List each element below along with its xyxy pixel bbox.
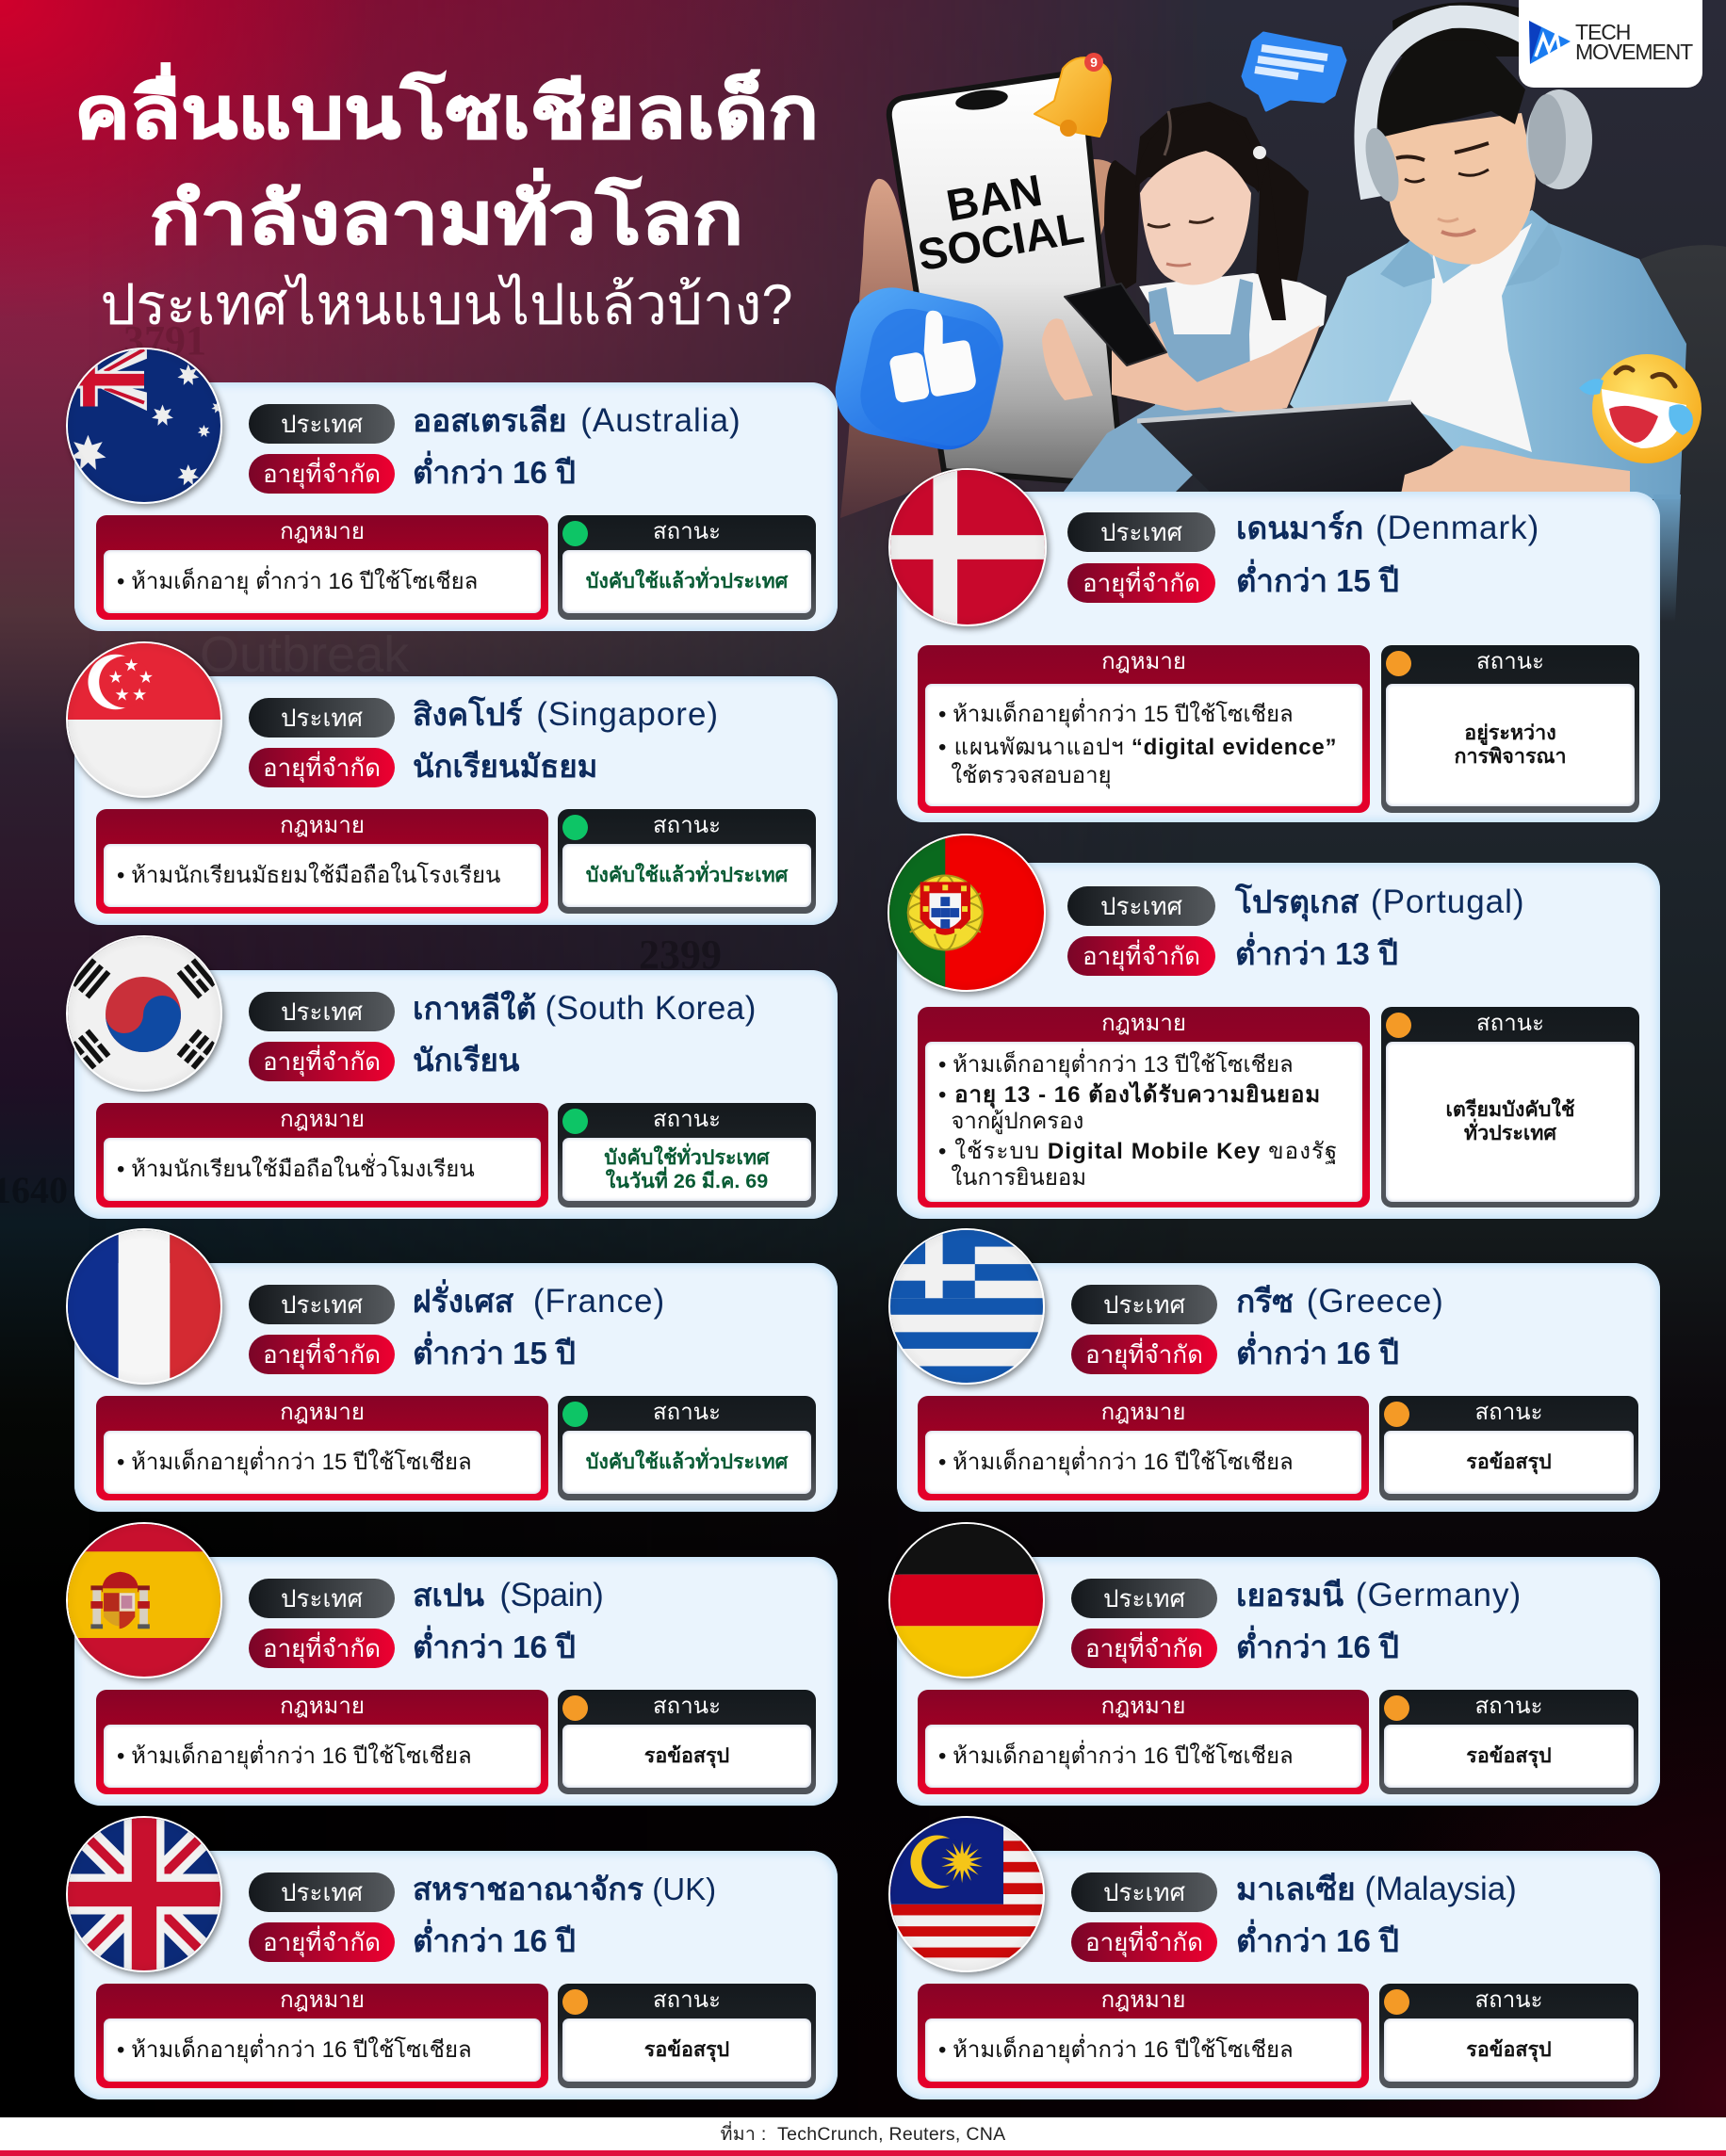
age limit value: ต่ำกว่า 15 ปี bbox=[413, 1336, 576, 1370]
flag: Malaysia bbox=[888, 1816, 1045, 1972]
label: country bbox=[1071, 1872, 1217, 1912]
panel: Denmark bbox=[897, 492, 1660, 822]
label: age limit bbox=[249, 1922, 395, 1962]
status box: บังคับใช้แล้วทั่วประเทศ bbox=[586, 864, 788, 886]
status box bbox=[1379, 1984, 1638, 2088]
label: country bbox=[249, 1285, 395, 1324]
label: country bbox=[249, 992, 395, 1031]
status box: สถานะ bbox=[653, 1987, 721, 2013]
label: country bbox=[1067, 512, 1215, 552]
tablet bbox=[1137, 401, 1455, 494]
law box: • ใช้ระบบ Digital Mobile Key ของรัฐ bbox=[938, 1139, 1338, 1164]
hand holding phone bbox=[840, 179, 947, 518]
status box: สถานะ bbox=[653, 519, 721, 544]
status box: บังคับใช้ทั่วประเทศ bbox=[604, 1145, 770, 1168]
status box bbox=[558, 1103, 816, 1208]
status box: รอข้อสรุป bbox=[1466, 2038, 1552, 2061]
label: country bbox=[249, 404, 395, 444]
status box bbox=[558, 809, 816, 914]
label: country bbox=[1067, 886, 1215, 926]
country name: เยอรมนี (Germany) bbox=[1236, 1577, 1522, 1613]
status box: สถานะ bbox=[653, 813, 721, 838]
label: age limit bbox=[1071, 1335, 1217, 1374]
law box: • อายุ 13 - 16 ต้องได้รับความยินยอม bbox=[938, 1082, 1321, 1108]
status box bbox=[558, 1396, 816, 1500]
law box bbox=[96, 1396, 548, 1500]
status box: ในวันที่ 26 มี.ค. 69 bbox=[606, 1170, 768, 1192]
label: country: ประเทศ bbox=[281, 997, 363, 1025]
flag: Greece bbox=[888, 1228, 1045, 1385]
background: 2399 bbox=[639, 932, 722, 978]
law box: กฎหมาย bbox=[1101, 649, 1186, 674]
label: country: ประเทศ bbox=[281, 1878, 363, 1906]
footer: source: ที่มา : TechCrunch, Reuters, CNA bbox=[721, 2124, 1005, 2145]
age limit value: ต่ำกว่า 16 ปี bbox=[413, 455, 576, 490]
law box: • ห้ามเด็กอายุต่ำกว่า 16 ปีใช้โซเชียล bbox=[117, 2036, 472, 2063]
law box: • ห้ามเด็กอายุต่ำกว่า 16 ปีใช้โซเชียล bbox=[938, 1743, 1294, 1769]
law box: กฎหมาย bbox=[1101, 1400, 1185, 1425]
label: country: ประเทศ bbox=[1103, 1290, 1185, 1319]
status box: บังคับใช้แล้วทั่วประเทศ bbox=[586, 570, 788, 592]
label: age limit: อายุที่จำกัด bbox=[263, 1927, 381, 1955]
panel: South Korea bbox=[74, 970, 838, 1219]
flag: Denmark bbox=[888, 468, 1047, 626]
logo: Tech Movement: MOVEMENT bbox=[1575, 40, 1692, 64]
panel: Germany bbox=[897, 1557, 1660, 1806]
law box bbox=[918, 1984, 1369, 2088]
law box: • ห้ามเด็กอายุต่ำกว่า 15 ปีใช้โซเชียล bbox=[938, 701, 1294, 727]
label: age limit: อายุที่จำกัด bbox=[1085, 1927, 1203, 1955]
law box: • ห้ามเด็กอายุ ต่ำกว่า 16 ปีใช้โซเชียล bbox=[117, 569, 478, 593]
title: กำลังลามทั่วโลก bbox=[150, 168, 743, 259]
status box: บังคับใช้แล้วทั่วประเทศ bbox=[586, 1451, 788, 1473]
panel: UK bbox=[74, 1851, 838, 2099]
label: country: ประเทศ bbox=[1100, 891, 1182, 919]
panel: Spain bbox=[74, 1557, 838, 1806]
law box bbox=[96, 1690, 548, 1794]
status box bbox=[558, 1984, 816, 2088]
law box bbox=[918, 1396, 1369, 1500]
status box: สถานะ bbox=[1475, 1987, 1542, 2013]
flag: France bbox=[66, 1228, 222, 1385]
title bbox=[74, 62, 819, 336]
logo: Tech Movement: TECH bbox=[1575, 20, 1630, 44]
age limit value: นักเรียน bbox=[413, 1043, 519, 1078]
label: country bbox=[1071, 1285, 1217, 1324]
status box: สถานะ bbox=[1476, 649, 1544, 674]
logo: Tech Movement bbox=[1519, 0, 1702, 88]
law box bbox=[96, 1103, 548, 1208]
status box bbox=[558, 1690, 816, 1794]
flag: UK bbox=[66, 1816, 222, 1972]
flag: Australia bbox=[66, 348, 222, 504]
law box: กฎหมาย bbox=[280, 519, 365, 544]
age limit value: ต่ำกว่า 16 ปี bbox=[413, 1629, 576, 1664]
label: age limit: อายุที่จำกัด bbox=[1085, 1339, 1203, 1368]
law box: • ห้ามนักเรียนมัธยมใช้มือถือในโรงเรียน bbox=[117, 863, 500, 887]
age limit value: นักเรียนมัธยม bbox=[413, 749, 597, 784]
law box bbox=[918, 1007, 1370, 1208]
law box bbox=[918, 645, 1370, 813]
law box: • ห้ามเด็กอายุต่ำกว่า 16 ปีใช้โซเชียล bbox=[938, 2036, 1294, 2063]
status box bbox=[1379, 1690, 1638, 1794]
label: age limit bbox=[249, 748, 395, 787]
status box: สถานะ bbox=[653, 1107, 721, 1132]
law box: กฎหมาย bbox=[280, 1107, 365, 1132]
status box: สถานะ bbox=[1475, 1694, 1542, 1719]
girl's phone bbox=[1065, 284, 1166, 365]
status box bbox=[1381, 645, 1639, 813]
status box: สถานะ bbox=[653, 1400, 721, 1425]
label: age limit bbox=[1067, 936, 1215, 976]
flag: South Korea bbox=[66, 935, 222, 1092]
panel: Singapore bbox=[74, 676, 838, 925]
label: country bbox=[249, 698, 395, 738]
icon: chat bubble bbox=[1243, 33, 1345, 110]
label: age limit bbox=[249, 454, 395, 494]
status box: สถานะ bbox=[1475, 1400, 1542, 1425]
law box bbox=[96, 809, 548, 914]
phone text: SOCIAL bbox=[914, 202, 1087, 280]
status box: เตรียมบังคับใช้ bbox=[1446, 1098, 1574, 1121]
law box: จากผู้ปกครอง bbox=[951, 1109, 1083, 1134]
law box: • ห้ามเด็กอายุต่ำกว่า 15 ปีใช้โซเชียล bbox=[117, 1449, 472, 1475]
country name: กรีซ (Greece) bbox=[1236, 1283, 1444, 1320]
law box: • ห้ามเด็กอายุต่ำกว่า 16 ปีใช้โซเชียล bbox=[117, 1743, 472, 1769]
country name: เกาหลีใต้ (South Korea) bbox=[413, 990, 757, 1027]
law box: กฎหมาย bbox=[1101, 1011, 1186, 1036]
label: age limit: อายุที่จำกัด bbox=[263, 754, 381, 782]
icon: laughing emoji bbox=[1579, 354, 1702, 463]
flag: Spain bbox=[66, 1522, 222, 1678]
panel: France bbox=[74, 1263, 838, 1512]
label: country bbox=[249, 1579, 395, 1618]
label: age limit: อายุที่จำกัด bbox=[263, 1047, 381, 1076]
age limit value: ต่ำกว่า 15 ปี bbox=[1236, 563, 1399, 598]
label: age limit bbox=[249, 1042, 395, 1081]
flag: Singapore bbox=[66, 641, 222, 798]
panel: Portugal bbox=[897, 863, 1660, 1219]
label: age limit: อายุที่จำกัด bbox=[1083, 942, 1200, 970]
country name: เดนมาร์ก (Denmark) bbox=[1236, 510, 1539, 546]
label: country: ประเทศ bbox=[1103, 1584, 1185, 1613]
title: คลื่นแบนโซเชียลเด็ก bbox=[74, 62, 819, 154]
country name: สหราชอาณาจักร (UK) bbox=[413, 1872, 716, 1906]
phone bbox=[889, 73, 1123, 485]
status box bbox=[1379, 1396, 1638, 1500]
country name: โปรตุเกส (Portugal) bbox=[1235, 883, 1525, 920]
label: country: ประเทศ bbox=[281, 1290, 363, 1319]
panel: Malaysia bbox=[897, 1851, 1660, 2099]
status box: รอข้อสรุป bbox=[1466, 1451, 1552, 1473]
status box: รอข้อสรุป bbox=[644, 1744, 729, 1767]
law box: กฎหมาย bbox=[280, 1694, 365, 1719]
status box: อยู่ระหว่าง bbox=[1464, 721, 1556, 744]
status box bbox=[558, 515, 816, 620]
illustration: children using devices with social icons bbox=[835, 2, 1726, 614]
status box: รอข้อสรุป bbox=[1466, 1744, 1552, 1767]
label: country: ประเทศ bbox=[281, 409, 363, 437]
panel: Greece bbox=[897, 1263, 1660, 1512]
label: age limit bbox=[1071, 1629, 1217, 1668]
law box: • ห้ามนักเรียนใช้มือถือในชั่วโมงเรียน bbox=[117, 1157, 475, 1181]
label: age limit: อายุที่จำกัด bbox=[263, 1339, 381, 1368]
law box: ในการยินยอม bbox=[951, 1165, 1086, 1191]
label: country bbox=[249, 1872, 395, 1912]
law box bbox=[96, 1984, 548, 2088]
label: age limit: อายุที่จำกัด bbox=[263, 1633, 381, 1662]
title: ประเทศไหนแบนไปแล้วบ้าง? bbox=[100, 272, 793, 336]
status box: สถานะ bbox=[1476, 1011, 1544, 1036]
label: country: ประเทศ bbox=[1100, 518, 1182, 546]
country name: สเปน (Spain) bbox=[413, 1577, 603, 1613]
headphones bbox=[1365, 17, 1545, 198]
label: age limit bbox=[1067, 563, 1215, 603]
label: age limit bbox=[1071, 1922, 1217, 1962]
law box: กฎหมาย bbox=[280, 1400, 365, 1425]
law box: กฎหมาย bbox=[1101, 1694, 1185, 1719]
status box: ทั่วประเทศ bbox=[1464, 1122, 1556, 1144]
label: country: ประเทศ bbox=[281, 1584, 363, 1613]
status box: รอข้อสรุป bbox=[644, 2038, 729, 2061]
status box bbox=[1381, 1007, 1639, 1208]
status box: สถานะ bbox=[653, 1694, 721, 1719]
status box: การพิจารณา bbox=[1454, 745, 1567, 768]
label: country: ประเทศ bbox=[1103, 1878, 1185, 1906]
country name: ฝรั่งเศส (France) bbox=[413, 1283, 665, 1320]
law box bbox=[918, 1690, 1369, 1794]
footer: source bbox=[0, 2117, 1726, 2156]
label: age limit bbox=[249, 1629, 395, 1668]
icon: like bbox=[827, 280, 1011, 458]
panel: Australia bbox=[74, 382, 838, 631]
girl bbox=[1042, 102, 1327, 499]
country name: มาเลเซีย (Malaysia) bbox=[1236, 1871, 1517, 1907]
law box: • ห้ามเด็กอายุต่ำกว่า 13 ปีใช้โซเชียล bbox=[938, 1052, 1294, 1078]
phone text bbox=[914, 165, 1087, 280]
age limit value: ต่ำกว่า 16 ปี bbox=[413, 1923, 576, 1958]
age limit value: ต่ำกว่า 16 ปี bbox=[1236, 1629, 1399, 1664]
law box bbox=[96, 515, 548, 620]
country name: ออสเตรเลีย (Australia) bbox=[413, 402, 741, 439]
label: country: ประเทศ bbox=[281, 703, 363, 731]
age limit value: ต่ำกว่า 13 ปี bbox=[1235, 936, 1398, 971]
law box: กฎหมาย bbox=[280, 813, 365, 838]
icon: bell: 9 bbox=[1090, 55, 1098, 70]
label: age limit: อายุที่จำกัด bbox=[1085, 1633, 1203, 1662]
label: age limit: อายุที่จำกัด bbox=[1083, 569, 1200, 597]
law box: กฎหมาย bbox=[1101, 1987, 1185, 2013]
label: country bbox=[1071, 1579, 1217, 1618]
flag: Germany bbox=[888, 1522, 1045, 1678]
flag: Portugal bbox=[887, 834, 1046, 992]
law box: • แผนพัฒนาแอปฯ “digital evidence” bbox=[938, 735, 1337, 759]
law box: • ห้ามเด็กอายุต่ำกว่า 16 ปีใช้โซเชียล bbox=[938, 1449, 1294, 1475]
phone text: BAN bbox=[942, 165, 1046, 231]
boy bbox=[1137, 2, 1686, 622]
law box: กฎหมาย bbox=[280, 1987, 365, 2013]
age limit value: ต่ำกว่า 16 ปี bbox=[1236, 1923, 1399, 1958]
label: age limit bbox=[249, 1335, 395, 1374]
background: 3791 bbox=[123, 317, 206, 364]
law box: ใช้ตรวจสอบอายุ bbox=[951, 763, 1112, 787]
age limit value: ต่ำกว่า 16 ปี bbox=[1236, 1336, 1399, 1370]
label: age limit: อายุที่จำกัด bbox=[263, 460, 381, 488]
icon: bell bbox=[1034, 53, 1111, 137]
country name: สิงคโปร์ (Singapore) bbox=[413, 696, 719, 733]
sofa bbox=[1639, 245, 1726, 565]
background: Outbreak bbox=[200, 626, 409, 683]
